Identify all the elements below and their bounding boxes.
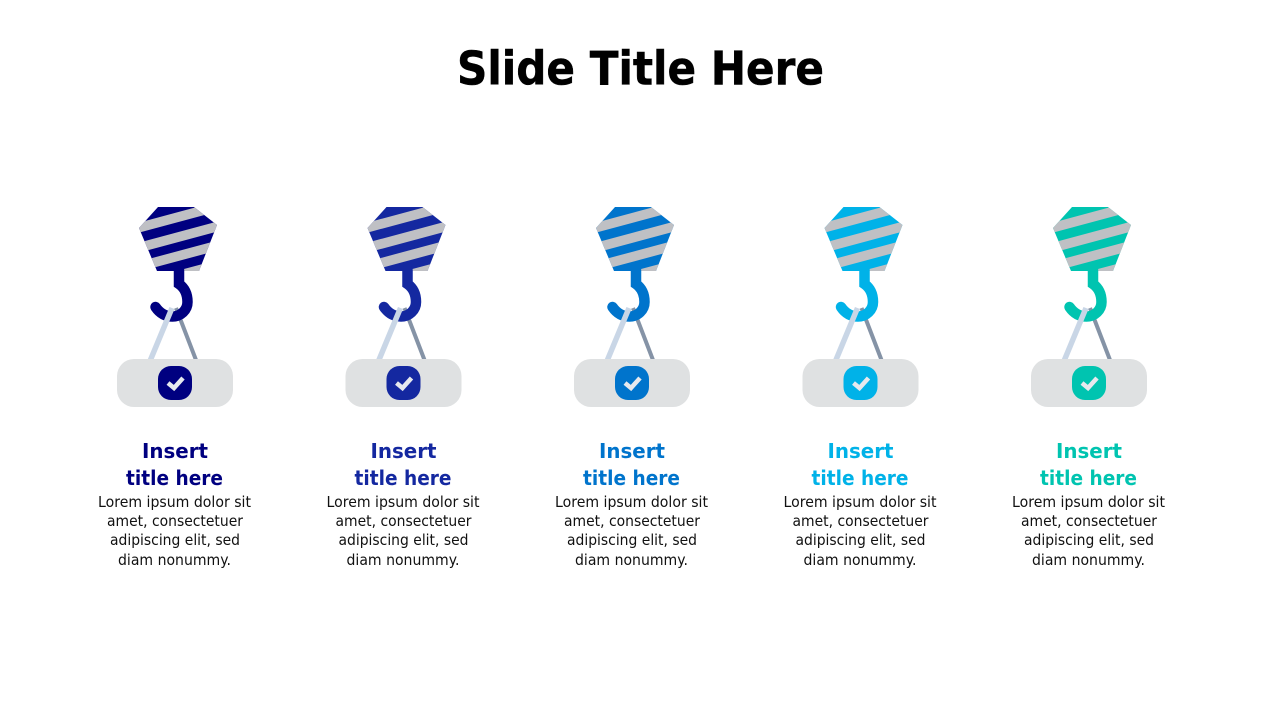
icon: crane hook 1 <box>139 207 217 359</box>
text block 1: adipiscing elit, sed <box>110 531 240 549</box>
text block 5: amet, consectetuer <box>1021 512 1158 530</box>
text block 4: Lorem ipsum dolor sit <box>784 493 936 511</box>
column 5 <box>1012 201 1165 569</box>
heading 4: title here <box>812 466 908 490</box>
text block 5: Lorem ipsum dolor sit <box>1012 493 1165 511</box>
text block 3: amet, consectetuer <box>564 512 701 530</box>
text block 3: diam nonummy. <box>575 551 688 569</box>
heading 5 <box>1040 439 1137 490</box>
text block 2 <box>326 493 480 569</box>
heading 3: Insert <box>599 439 665 463</box>
icon: crane hook 4 <box>824 207 902 359</box>
heading 2 <box>354 439 452 490</box>
text block 1: Lorem ipsum dolor sit <box>98 493 251 511</box>
text block 1: diam nonummy. <box>118 551 231 569</box>
icon: crane hook 5 <box>1053 207 1131 359</box>
column 3 <box>555 201 708 569</box>
text block 2: diam nonummy. <box>346 551 460 569</box>
heading 2: Insert <box>370 439 437 463</box>
title: Slide Title Here <box>457 42 824 96</box>
heading 5: title here <box>1040 466 1137 490</box>
text block 4 <box>784 493 936 569</box>
load pill 5 <box>1031 359 1147 407</box>
heading 5: Insert <box>1056 439 1122 463</box>
heading 1 <box>126 439 223 490</box>
text block 3 <box>555 493 708 569</box>
icon: crane hook 3 <box>596 207 674 359</box>
text block 1 <box>98 493 251 569</box>
text block 3: Lorem ipsum dolor sit <box>555 493 708 511</box>
heading 1: title here <box>126 466 223 490</box>
load pill 3 <box>574 359 690 407</box>
heading 3: title here <box>583 466 680 490</box>
text block 5: diam nonummy. <box>1032 551 1145 569</box>
text block 4: adipiscing elit, sed <box>796 531 926 549</box>
heading 4: Insert <box>828 439 894 463</box>
column 4 <box>784 201 936 569</box>
text block 1: amet, consectetuer <box>107 512 244 530</box>
text block 4: amet, consectetuer <box>792 512 929 530</box>
heading 3 <box>583 439 680 490</box>
text block 2: Lorem ipsum dolor sit <box>326 493 480 511</box>
load pill 2 <box>346 359 462 407</box>
text block 4: diam nonummy. <box>804 551 916 569</box>
column 2 <box>326 201 480 569</box>
load pill 4 <box>802 359 918 407</box>
load pill 1 <box>117 359 233 407</box>
text block 2: adipiscing elit, sed <box>338 531 468 549</box>
heading 2: title here <box>354 466 452 490</box>
text block 5: adipiscing elit, sed <box>1024 531 1154 549</box>
column 1 <box>98 201 251 569</box>
heading 4 <box>812 439 908 490</box>
text block 2: amet, consectetuer <box>336 512 472 530</box>
text block 5 <box>1012 493 1165 569</box>
text block 3: adipiscing elit, sed <box>567 531 697 549</box>
icon: crane hook 2 <box>368 207 446 359</box>
heading 1: Insert <box>142 439 208 463</box>
